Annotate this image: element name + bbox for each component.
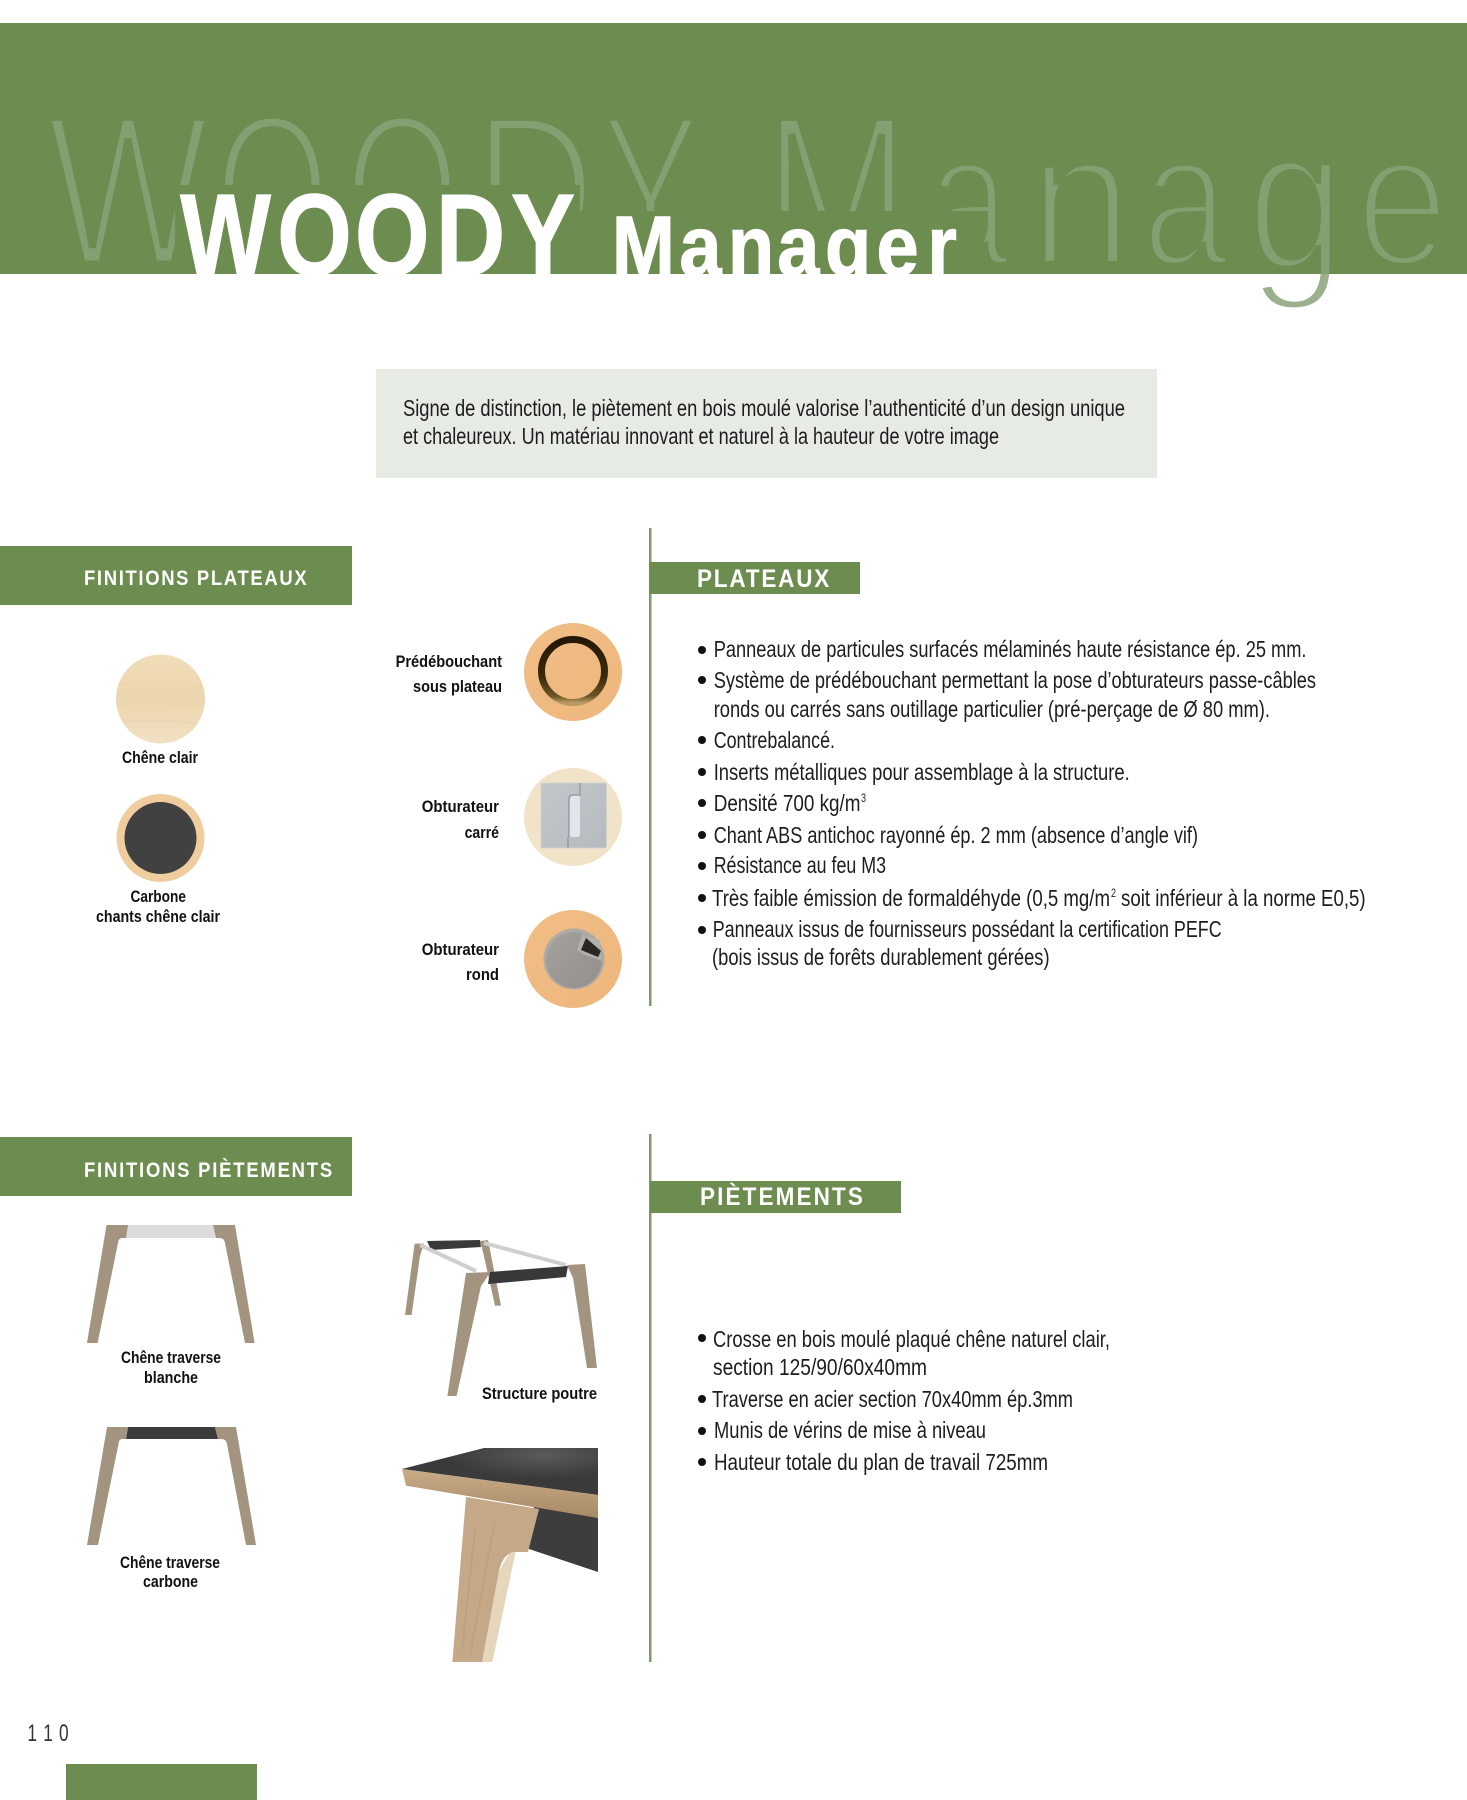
piètements bullet list: Traverse en acier section 70x40mm ép.3mm [712,1386,1073,1412]
ghost title descender below the banner: g [1247,85,1345,313]
plateaux bullet list: Inserts métalliques pour assemblage à la structure. [714,759,1130,785]
panel: plateaux heading: PLATEAUX [697,565,829,593]
ghost title: WOODY Manage on the banner: n [1029,91,1133,306]
ghost title: WOODY Manage on the banner: W [47,69,209,311]
leg: chêne traverse carbone [87,1427,256,1591]
ghost title: WOODY Manage on the banner: a [927,91,1010,306]
plateaux bullet list: Chant ABS antichoc rayonné ép. 2 mm (absence d’angle vif) [714,822,1198,848]
swatch: chêne clair [116,654,205,767]
plateaux bullet list: Panneaux issus de fournisseurs possédant la certification PEFC [713,916,1222,942]
plateaux bullet list: 2 [1111,886,1116,900]
piètements bullet list: section 125/90/60x40mm [713,1354,927,1380]
panel: piètements heading: PIÈTEMENTS [700,1182,863,1211]
intro text box: Signe de distinction, le piètement en bois moulé valorise l’authenticité d’un design unique [403,395,1125,421]
intro text box: et chaleureux. Un matériau innovant et naturel à la hauteur de votre image [403,423,999,449]
swatch: carbone chants chêne clair: chants chêne clair [96,907,220,926]
piètements bullet list: Munis de vérins de mise à niveau [714,1417,986,1443]
panel: finitions piètements heading [0,1137,352,1196]
divider line plateaux [649,528,652,1006]
plateaux bullet list: Système de prédébouchant permettant la pose d’obturateurs passe-câbles [714,667,1316,693]
plateaux bullet list: ronds ou carrés sans outillage particulier (pré-perçage de Ø 80 mm). [714,696,1270,722]
leg: chêne traverse blanche: Chêne traverse [121,1348,221,1367]
main title [180,193,956,274]
plateaux bullet list: Résistance au feu M3 [714,852,886,878]
ghost title: WOODY Manage on the banner: a [1142,91,1229,306]
main title: Manager [612,199,957,293]
leg: chêne traverse carbone: Chêne traverse [120,1553,220,1572]
option: obturateur carré: Obturateur [422,797,499,816]
plateaux bullet list: soit inférieur à la norme E0,5) [1121,885,1366,911]
ghost title: WOODY Manage on the banner: O [345,69,460,311]
panel: finitions plateaux heading: FINITIONS PLATEAUX [84,567,307,590]
illustration: structure poutre: Structure poutre [482,1384,597,1403]
main title: WOODY [180,170,575,300]
ghost title: WOODY Manage on the banner: O [215,69,330,311]
plateaux bullet list: Densité 700 kg/m [714,790,860,816]
ghost title: WOODY Manage on the banner: e [1356,91,1449,306]
leg: chêne traverse blanche: blanche [144,1368,198,1387]
plateaux bullet list: Panneaux de particules surfacés mélaminés haute résistance ép. 25 mm. [714,636,1306,662]
leg: chêne traverse carbone: carbone [143,1572,198,1591]
plateaux bullet list: Très faible émission de formaldéhyde (0,5 mg/m [712,885,1110,911]
ghost title: WOODY Manage on the banner [52,118,1438,274]
header banner [0,23,1467,313]
option: obturateur carré: carré [465,823,499,842]
option: obturateur carré [422,768,622,866]
option: obturateur rond [422,910,622,1008]
panel: plateaux heading [649,562,860,594]
piètements bullet list [698,1326,1110,1475]
photo: plateau corner detail [402,1448,598,1662]
illustration: structure poutre [405,1240,597,1403]
option: obturateur rond: Obturateur [422,940,499,959]
plateaux bullet list [698,636,1366,970]
ghost title: WOODY Manage on the banner: Y [601,69,700,311]
option: prédébouchant sous plateau [396,623,622,721]
leg: chêne traverse blanche [87,1225,255,1387]
page number: 110 [27,1720,69,1747]
panel: finitions piètements heading: FINITIONS PIÈTEMENTS [84,1158,332,1182]
ghost title: WOODY Manage on the banner: D [473,69,596,311]
option: prédébouchant sous plateau: sous plateau [413,677,502,696]
option: obturateur rond: rond [466,965,499,984]
option: prédébouchant sous plateau: Prédébouchant [396,652,502,671]
swatch: carbone chants chêne clair [96,794,220,926]
intro text box [376,369,1157,478]
ghost title: WOODY Manage on the banner: M [763,69,910,311]
plateaux bullet list: 3 [861,791,866,805]
panel: finitions plateaux heading [0,546,352,605]
piètements bullet list: Crosse en bois moulé plaqué chêne naturel clair, [713,1326,1110,1352]
piètements bullet list: Hauteur totale du plan de travail 725mm [714,1449,1048,1475]
ghost title: WOODY Manage on the banner: g [1247,85,1345,313]
panel: piètements heading [650,1181,901,1213]
plateaux bullet list: Contrebalancé. [714,727,835,753]
swatch: chêne clair: Chêne clair [122,748,198,767]
divider line piètements [649,1134,652,1662]
swatch: carbone chants chêne clair: Carbone [130,887,186,906]
footer green tab [66,1764,257,1800]
plateaux bullet list: (bois issus de forêts durablement gérées) [712,944,1050,970]
